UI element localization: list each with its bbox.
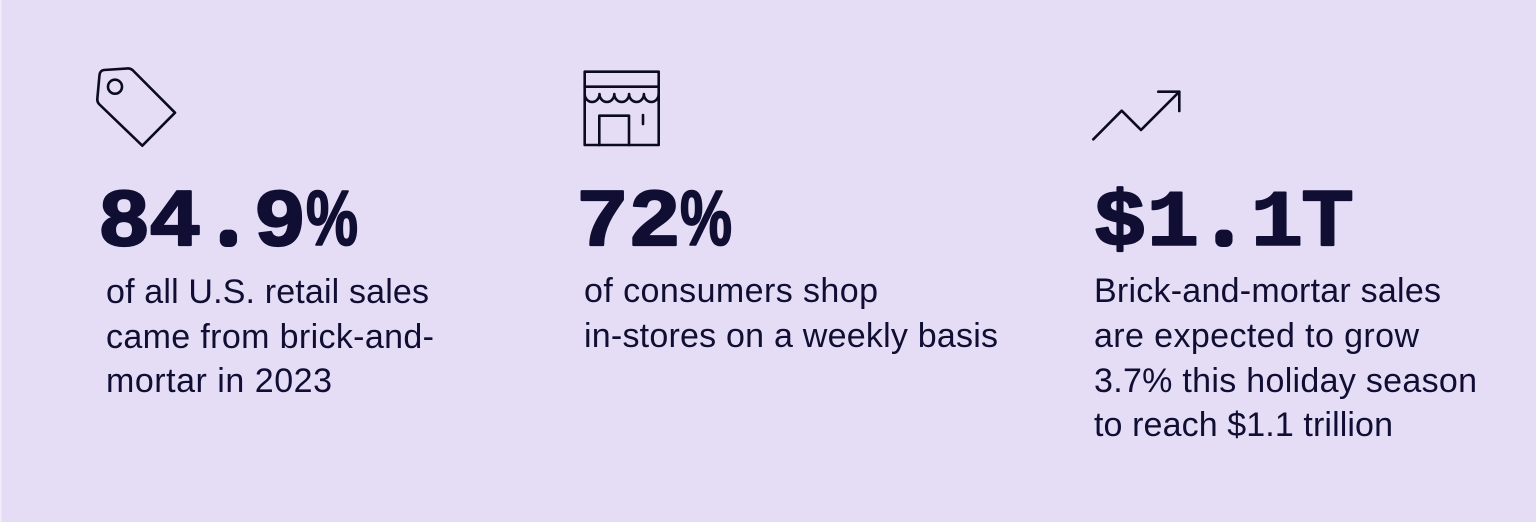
text: retail sales description xyxy=(106,273,434,400)
panel: weekly in-store shoppers xyxy=(578,72,998,355)
statistic: 84.9%: % xyxy=(306,175,358,262)
icon: storefront xyxy=(585,72,659,145)
text: holiday growth description: 3.7% this holiday season xyxy=(1094,362,1477,400)
statistic: $1.1T: $ xyxy=(1096,174,1144,262)
icon: rising trend arrow xyxy=(1093,92,1179,139)
panel: retail sales share xyxy=(97,68,434,400)
text: retail sales description: mortar in 2023 xyxy=(106,362,332,400)
statistic: 72%: 2 xyxy=(630,174,679,262)
statistic: $1.1T: . xyxy=(1220,215,1228,248)
text: retail sales description: of all U.S. retail sales xyxy=(106,273,429,311)
statistic: $1.1T: 1 xyxy=(1250,179,1303,270)
statistic: 84.9%: 8 xyxy=(100,174,148,262)
statistic: $1.1T: T xyxy=(1303,174,1352,262)
statistic: 72%: 7 xyxy=(578,174,627,262)
statistic: 84.9% xyxy=(100,174,358,262)
text: weekly shoppers description: in-stores on a weekly basis xyxy=(584,317,998,355)
text: holiday growth description: to reach $1.1 trillion xyxy=(1094,406,1393,444)
statistic: $1.1T: 1 xyxy=(1146,179,1199,270)
text: holiday growth description: Brick-and-mortar sales xyxy=(1094,272,1441,310)
statistic: 84.9%: 9 xyxy=(256,174,304,262)
icon: price tag xyxy=(97,68,175,146)
text: holiday growth description xyxy=(1094,272,1477,444)
panel: holiday sales growth xyxy=(1093,92,1477,444)
statistic: 72% xyxy=(578,174,732,262)
text: weekly shoppers description: of consumers shop xyxy=(584,272,878,310)
text: retail sales description: came from brick-and- xyxy=(106,318,434,356)
statistic: 84.9%: 4 xyxy=(150,174,199,262)
text: weekly shoppers description xyxy=(584,272,998,355)
statistic: 72%: % xyxy=(680,175,732,262)
text: holiday growth description: are expected to grow xyxy=(1094,317,1419,355)
statistic: $1.1T xyxy=(1096,174,1352,270)
statistic: 84.9%: . xyxy=(224,215,233,248)
